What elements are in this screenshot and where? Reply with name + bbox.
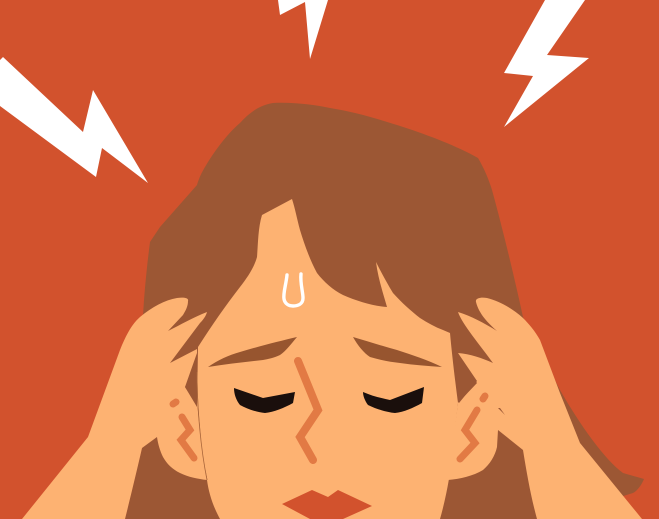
hair wedge by right temple [452, 340, 477, 403]
lightning bolt: top centre [278, 0, 328, 59]
lightning bolt: right [504, 0, 589, 127]
eye: right [363, 387, 424, 413]
right hand and arm [448, 298, 642, 519]
face [197, 199, 458, 519]
pain mark: left ear [173, 402, 194, 458]
face edge line [197, 372, 207, 480]
hair wedge by left temple [185, 372, 197, 405]
pain mark: right ear [460, 396, 485, 459]
face skin [197, 199, 458, 519]
eye: left [234, 388, 295, 413]
left hand and arm [22, 298, 207, 519]
eyebrow: right [353, 337, 442, 367]
left arm, hand and ear shape [22, 298, 207, 519]
small crease in right hand [498, 408, 505, 415]
nose zigzag [298, 361, 318, 460]
right arm, hand and ear shape [448, 298, 642, 519]
eyebrow: left [208, 337, 297, 367]
hair [120, 103, 644, 519]
lightning bolt: left [0, 57, 148, 183]
face edge line over ear [197, 372, 207, 480]
sweat drop [284, 274, 303, 306]
lips [282, 490, 372, 519]
